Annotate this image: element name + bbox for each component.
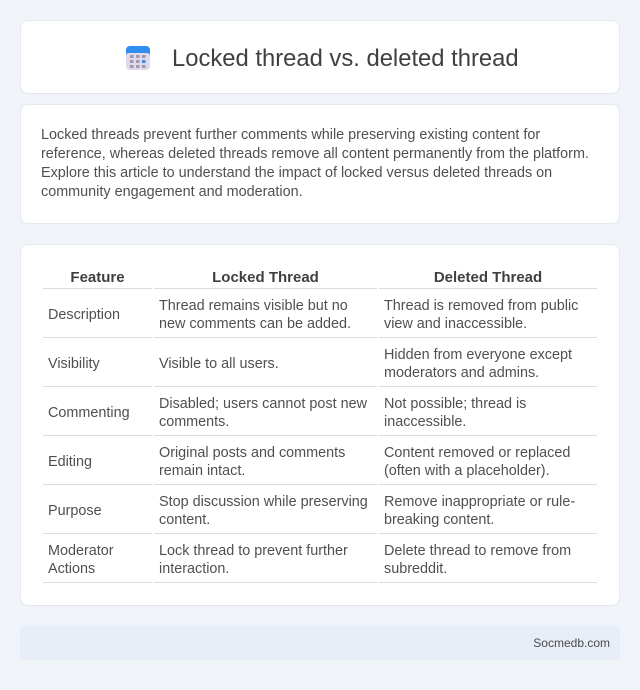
intro text xyxy=(41,127,589,200)
table headers xyxy=(70,269,542,286)
comparison table: Remove inappropriate or rule- xyxy=(384,494,575,510)
intro text: Locked threads prevent further comments while preserving existing content for xyxy=(41,127,540,143)
table card xyxy=(20,244,620,606)
row: commenting: Commenting xyxy=(48,405,130,421)
comparison table: Original posts and comments xyxy=(159,445,345,461)
comparison table: remain intact. xyxy=(159,463,245,479)
comparison table: Stop discussion while preserving xyxy=(159,494,368,510)
comparison table: Delete thread to remove from xyxy=(384,543,571,559)
comparison table: new comments can be added. xyxy=(159,316,351,332)
comparison table: Visible to all users. xyxy=(159,356,279,372)
row: moderator actions: Actions xyxy=(48,561,95,577)
table headers: Feature xyxy=(70,269,125,286)
comparison table: view and inaccessible. xyxy=(384,316,527,332)
comparison table: subreddit. xyxy=(384,561,447,577)
comparison table xyxy=(43,269,597,583)
comparison table: Thread remains visible but no xyxy=(159,298,348,314)
row: description: Description xyxy=(48,307,120,323)
row: editing: Editing xyxy=(48,454,92,470)
row: moderator actions xyxy=(48,543,114,577)
comparison table: Content removed or replaced xyxy=(384,445,570,461)
intro card xyxy=(20,104,620,224)
comparison table: moderators and admins. xyxy=(384,365,539,381)
comparison table: inaccessible. xyxy=(384,414,466,430)
footer bar xyxy=(20,626,620,660)
comparison table: Disabled; users cannot post new xyxy=(159,396,367,412)
row: purpose: Purpose xyxy=(48,503,102,519)
comparison table: (often with a placeholder). xyxy=(384,463,550,479)
intro text: reference, whereas deleted threads remove all content permanently from the platform. xyxy=(41,146,589,162)
comparison table: Lock thread to prevent further xyxy=(159,543,348,559)
comparison table: content. xyxy=(159,512,210,528)
comparison table: breaking content. xyxy=(384,512,494,528)
title card xyxy=(20,20,620,94)
comparison table: comments. xyxy=(159,414,229,430)
comparison table: Not possible; thread is xyxy=(384,396,526,412)
title: Locked thread vs. deleted thread xyxy=(172,45,519,72)
comparison table: Thread is removed from public xyxy=(384,298,578,314)
table headers: Locked Thread xyxy=(212,269,319,286)
row: moderator actions: Moderator xyxy=(48,543,114,559)
comparison table: interaction. xyxy=(159,561,229,577)
footer text: Socmedb.com xyxy=(533,636,610,650)
intro text: community engagement and moderation. xyxy=(41,184,303,200)
table headers: Deleted Thread xyxy=(434,269,542,286)
comparison table: Hidden from everyone except xyxy=(384,347,572,363)
intro text: Explore this article to understand the impact of locked versus deleted threads on xyxy=(41,165,552,181)
row: visibility: Visibility xyxy=(48,356,100,372)
icon: calendar xyxy=(126,46,150,70)
